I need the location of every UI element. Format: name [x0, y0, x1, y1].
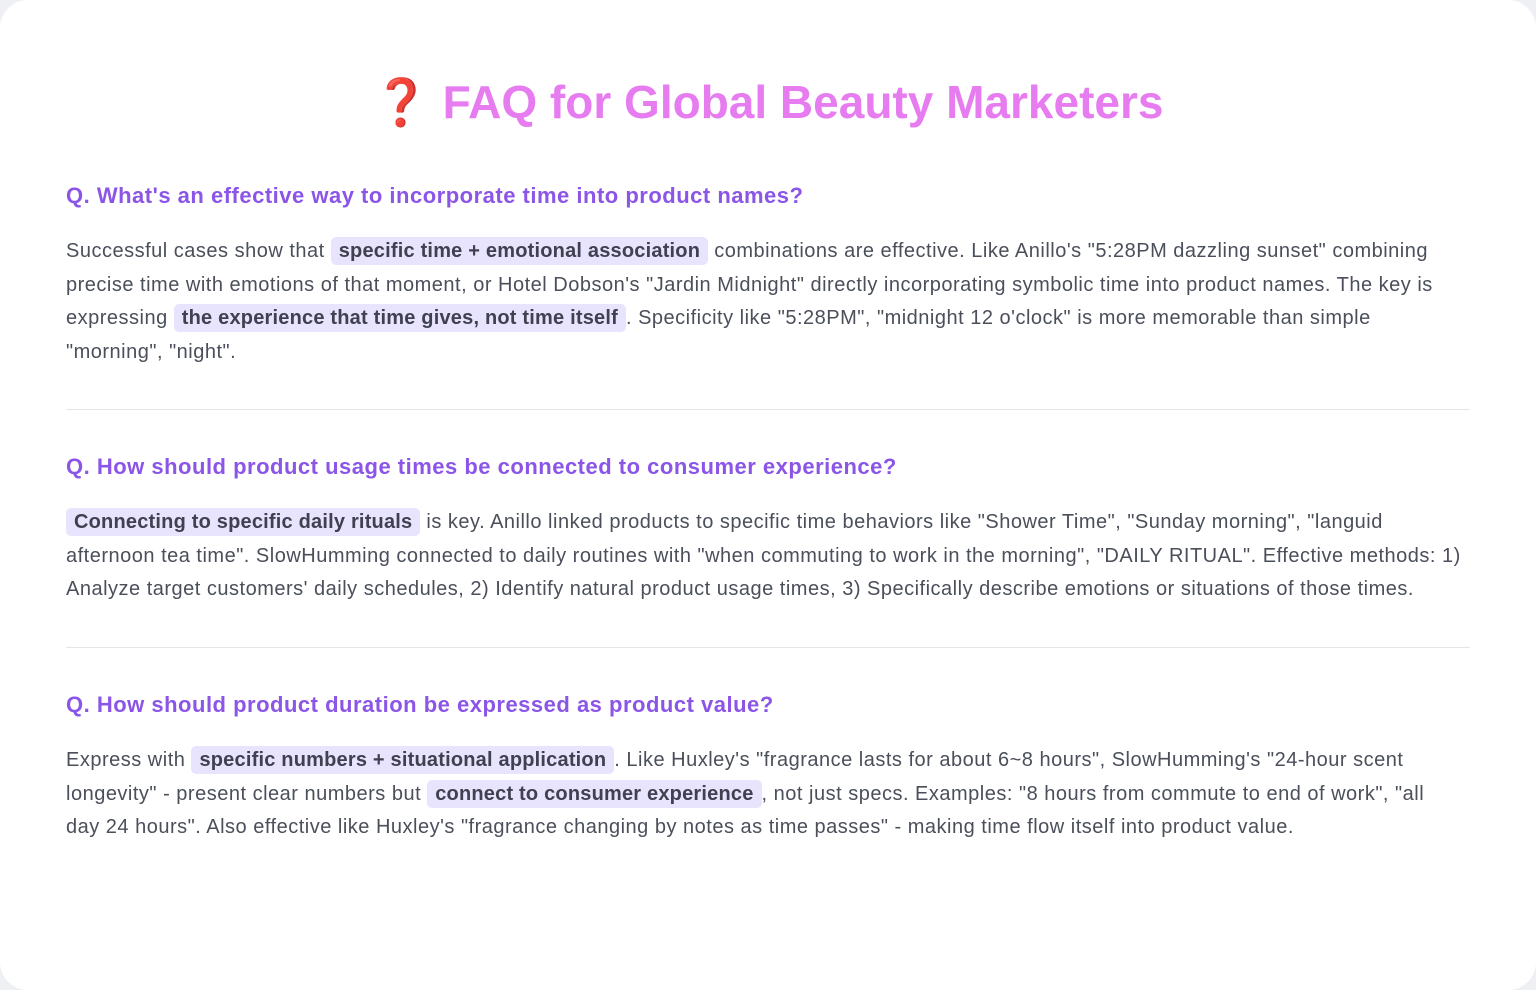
answer 3: [66, 746, 1424, 838]
answer 2: Analyze target customers' daily schedules, 2) Identify natural product usage times, 3) Specifically describe emotions or situations of those times.: [66, 578, 1414, 600]
question 1: Q. What's an effective way to incorporate time into product names?: [66, 183, 803, 208]
answer 3: day 24 hours". Also effective like Huxley's "fragrance changing by notes as time passes" - making time flow itself into product value.: [66, 816, 1294, 838]
question 2: Q. How should product usage times be connected to consumer experience?: [66, 454, 897, 479]
answer 1: [66, 237, 1433, 362]
answer 3: longevity" - present clear numbers but connect to consumer experience , not just specs. Examples: "8 hours from commute to end of work", "all: [66, 782, 1424, 804]
answer 1: "morning", "night".: [66, 340, 236, 362]
answer 2: Connecting to specific daily rituals is key. Anillo linked products to specific time behaviors like "Shower Time", "Sunday morning", "languid: [74, 511, 1383, 533]
answer 1: precise time with emotions of that moment, or Hotel Dobson's "Jardin Midnight" directly incorporating symbolic time into product names. The key is: [66, 274, 1433, 296]
answer 2: afternoon tea time". SlowHumming connected to daily routines with "when commuting to work in the morning", "DAILY RITUAL". Effective methods: 1): [66, 544, 1461, 566]
answer 2: [66, 508, 1461, 600]
answer 1: Successful cases show that specific time + emotional association combinations are effective. Like Anillo's "5:28PM dazzling sunset" combining: [66, 240, 1428, 262]
title: ❓ FAQ for Global Beauty Marketers: [373, 76, 1163, 128]
answer 3: Express with specific numbers + situational application . Like Huxley's "fragrance lasts for about 6~8 hours", SlowHumming's "24-hour scent: [66, 749, 1403, 771]
question 3: Q. How should product duration be expressed as product value?: [66, 692, 774, 717]
answer 1: expressing the experience that time gives, not time itself . Specificity like "5:28PM", "midnight 12 o'clock" is more memorable than simple: [66, 307, 1371, 329]
